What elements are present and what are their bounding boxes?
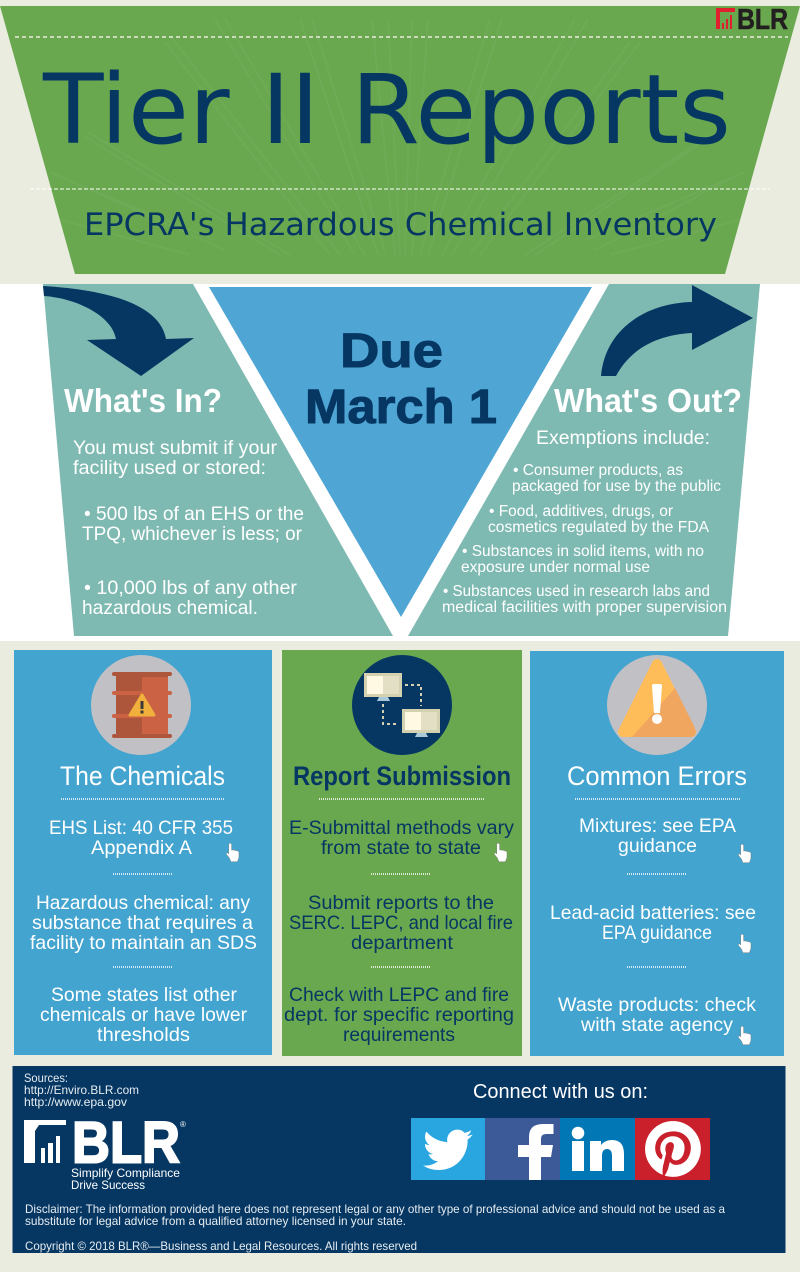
icon: pointer hand: [738, 934, 751, 953]
text block: exemptions: • Substances in solid items, with no: [462, 543, 704, 560]
title: Tier II Reports: [42, 54, 731, 166]
text: due date: [305, 325, 497, 434]
arrow: right: [601, 285, 753, 376]
panel: what's out: [408, 284, 760, 636]
heading: report submission: Report Submission: [293, 761, 511, 791]
text: submission list: requirements: [343, 1024, 455, 1046]
icon: pointer hand: [738, 1026, 751, 1045]
text block: exemptions: Exemptions include:: [536, 428, 710, 449]
text: errors list: [550, 815, 756, 1036]
text block: what's in: hazardous chemical.: [82, 597, 258, 619]
text: errors list: Lead-acid batteries: see: [550, 902, 756, 924]
icon: BLR logo large: Drive Success: [71, 1178, 145, 1192]
panel: report submission: [282, 650, 522, 1056]
icon: pointer hand: [226, 843, 239, 862]
icon: twitter: [411, 1118, 485, 1180]
text: submission list: E-Submittal methods vary: [289, 817, 514, 839]
text block: what's in: [73, 437, 304, 619]
text block: exemptions: packaged for use by the public: [512, 478, 721, 495]
icon: BLR logo large: Simplify Compliance: [71, 1166, 180, 1180]
text: chemicals list: Appendix A: [91, 837, 192, 859]
text: chemicals list: Hazardous chemical: any: [36, 892, 250, 914]
text: sources: http://Enviro.BLR.com: [24, 1083, 139, 1097]
text: errors list: Mixtures: see EPA: [579, 815, 736, 837]
text: errors list: guidance: [618, 835, 697, 857]
panel: the chemicals: [14, 650, 272, 1055]
text: disclaimer: Disclaimer: The information provided here does not represent legal or any other type of professional advice and should not be used as a: [25, 1202, 725, 1216]
icon: facebook: [485, 1118, 560, 1180]
subtitle: EPCRA's Hazardous Chemical Inventory: [84, 207, 717, 243]
text: chemicals list: EHS List: 40 CFR 355: [49, 817, 233, 839]
text block: exemptions: • Food, additives, drugs, or: [489, 503, 673, 520]
heading: connect: Connect with us on:: [473, 1081, 648, 1103]
icon: linkedin: [560, 1118, 635, 1180]
heading: the chemicals: The Chemicals: [60, 761, 225, 791]
text: errors list: with state agency: [580, 1014, 733, 1036]
heading: what's out: What's Out?: [554, 382, 742, 419]
text block: exemptions: • Consumer products, as: [513, 462, 683, 479]
text: submission list: Check with LEPC and fire: [289, 984, 509, 1006]
text: sources: http://www.epa.gov: [24, 1095, 127, 1109]
icon: BLR logo small: BLR: [737, 4, 788, 36]
text block: what's in: facility used or stored:: [73, 457, 266, 479]
text: chemicals list: [30, 817, 257, 1046]
text block: what's in: TPQ, whichever is less; or: [82, 523, 302, 545]
text: sources: Sources:: [24, 1071, 68, 1085]
white band: [0, 284, 800, 641]
icon: BLR logo large: BLR: [72, 1110, 180, 1176]
text block: exemptions: [442, 428, 727, 616]
text: disclaimer: Copyright © 2018 BLR®—Business and Legal Resources. All rights reserved: [25, 1239, 417, 1253]
text: chemicals list: thresholds: [97, 1024, 190, 1046]
panel: footer: [12, 1066, 786, 1253]
text: chemicals list: facility to maintain an SDS: [30, 932, 257, 954]
panel: what's in: [43, 284, 393, 636]
icon: BLR logo large: [24, 1110, 186, 1192]
text block: what's in: You must submit if your: [73, 437, 278, 459]
text: submission list: Submit reports to the: [308, 892, 494, 914]
text block: exemptions: cosmetics regulated by the FDA: [488, 519, 710, 536]
icon: BLR logo large: ®: [180, 1120, 186, 1129]
icon: warning triangle: [607, 655, 707, 755]
text: disclaimer: substitute for legal advice from a qualified attorney licensed in your state.: [25, 1214, 406, 1228]
heading: what's in: What's In?: [64, 382, 222, 419]
text: submission list: SERC. LEPC, and local fire: [289, 912, 513, 934]
text block: exemptions: • Substances used in research labs and: [443, 583, 710, 600]
icon: pointer hand: [738, 844, 751, 863]
text block: exemptions: exposure under normal use: [461, 559, 650, 576]
text: submission list: from state to state: [321, 837, 481, 859]
text: chemicals list: chemicals or have lower: [40, 1004, 247, 1026]
text: errors list: Waste products: check: [558, 994, 756, 1016]
text block: exemptions: medical facilities with proper supervision: [442, 599, 727, 616]
text: submission list: [284, 817, 514, 1046]
icon: pointer hand: [494, 843, 507, 862]
panel: due date triangle: [209, 287, 592, 617]
text: chemicals list: substance that requires a: [32, 912, 253, 934]
text: due date: March 1: [305, 381, 497, 434]
icon: BLR logo small: [716, 4, 788, 36]
text: submission list: dept. for specific reporting: [284, 1004, 514, 1026]
icon: networked computers: [352, 655, 452, 755]
arrow: down: [43, 286, 194, 376]
text: submission list: department: [351, 932, 454, 954]
heading: common errors: Common Errors: [567, 761, 747, 791]
text: due date: Due: [340, 325, 443, 378]
text: errors list: EPA guidance: [602, 922, 712, 944]
panel: header banner: [0, 6, 800, 274]
text: disclaimer: [25, 1202, 725, 1253]
text block: what's in: • 10,000 lbs of any other: [84, 577, 298, 599]
text block: what's in: • 500 lbs of an EHS or the: [84, 503, 304, 525]
panel: common errors: [530, 651, 784, 1056]
icon: hazard barrel: [91, 655, 191, 755]
icon: pinterest: [635, 1118, 710, 1180]
text: chemicals list: Some states list other: [51, 984, 237, 1006]
text: sources: [24, 1071, 139, 1109]
